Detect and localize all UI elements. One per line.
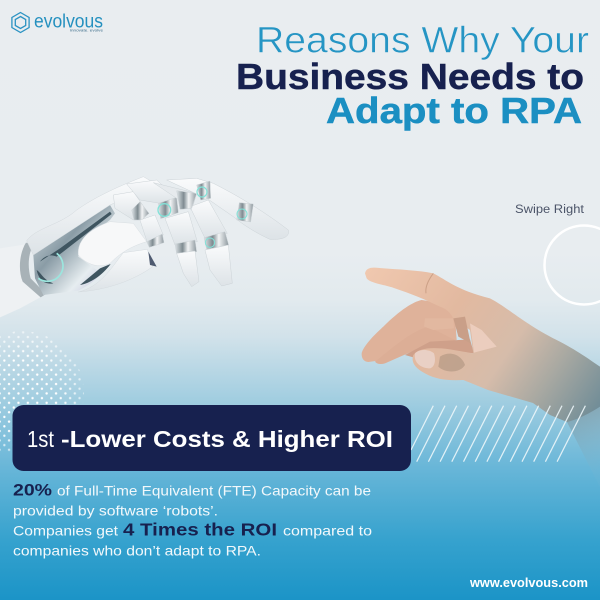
robot back plate: [27, 177, 155, 255]
halftone dots: [0, 331, 84, 455]
robot white palm: [78, 222, 147, 266]
robot finger three: [153, 183, 232, 286]
icon: hexagon logo mark: [12, 12, 29, 32]
swipe right label: Swipe Right: [515, 204, 585, 216]
website url: www.evolvous.com: [469, 575, 588, 590]
heading banner: 1st: [27, 426, 54, 452]
lower arm fade: [550, 390, 600, 487]
body text: Companies get: [13, 522, 118, 538]
robot hand: [0, 177, 289, 317]
robot palm glass: [33, 205, 115, 295]
logo: evolvous: innovate. evolve: [70, 28, 104, 32]
heading banner: [12, 405, 411, 471]
knuckle highlight: [470, 323, 497, 353]
curled ring finger: [375, 327, 458, 364]
curled middle finger: [362, 300, 457, 362]
robot pinky knuckle: [148, 252, 157, 267]
body text: [13, 480, 372, 558]
index knuckle crease: [426, 273, 433, 293]
palm crease: [453, 317, 471, 343]
robot finger one: [113, 192, 164, 247]
title: Reasons Why Your: [256, 20, 589, 60]
robot teal ring: [38, 253, 63, 281]
robot forearm: [0, 245, 42, 317]
body text: 4 Times the ROI: [123, 520, 277, 540]
body text: of Full-Time Equivalent (FTE) Capacity can be: [57, 482, 371, 498]
thumbnail: [415, 350, 435, 368]
logo: evolvous: evolvous: [34, 12, 103, 32]
finger shadow: [424, 318, 454, 330]
robot lower palm: [78, 249, 153, 292]
diagonal lines: [411, 406, 585, 462]
body text: companies who don’t adapt to RPA.: [13, 542, 261, 558]
hand body and index finger: [365, 268, 600, 422]
body text: 20%: [13, 480, 52, 500]
robot finger four: [167, 178, 289, 239]
robot finger two: [127, 180, 199, 287]
title: Business Needs to: [236, 56, 584, 97]
body text: compared to: [283, 522, 372, 538]
body text: provided by software ‘robots’.: [13, 502, 218, 518]
robot wrist ring: [20, 243, 46, 297]
heading banner: -Lower Costs & Higher ROI: [61, 426, 393, 452]
title: [236, 20, 589, 131]
swipe circle: [544, 226, 600, 304]
robot glass dark streaks: [37, 212, 112, 285]
title: Adapt to RPA: [326, 90, 582, 131]
human hand: [362, 268, 600, 487]
curled little finger: [405, 339, 474, 357]
thumb knuckle shading: [438, 354, 465, 371]
